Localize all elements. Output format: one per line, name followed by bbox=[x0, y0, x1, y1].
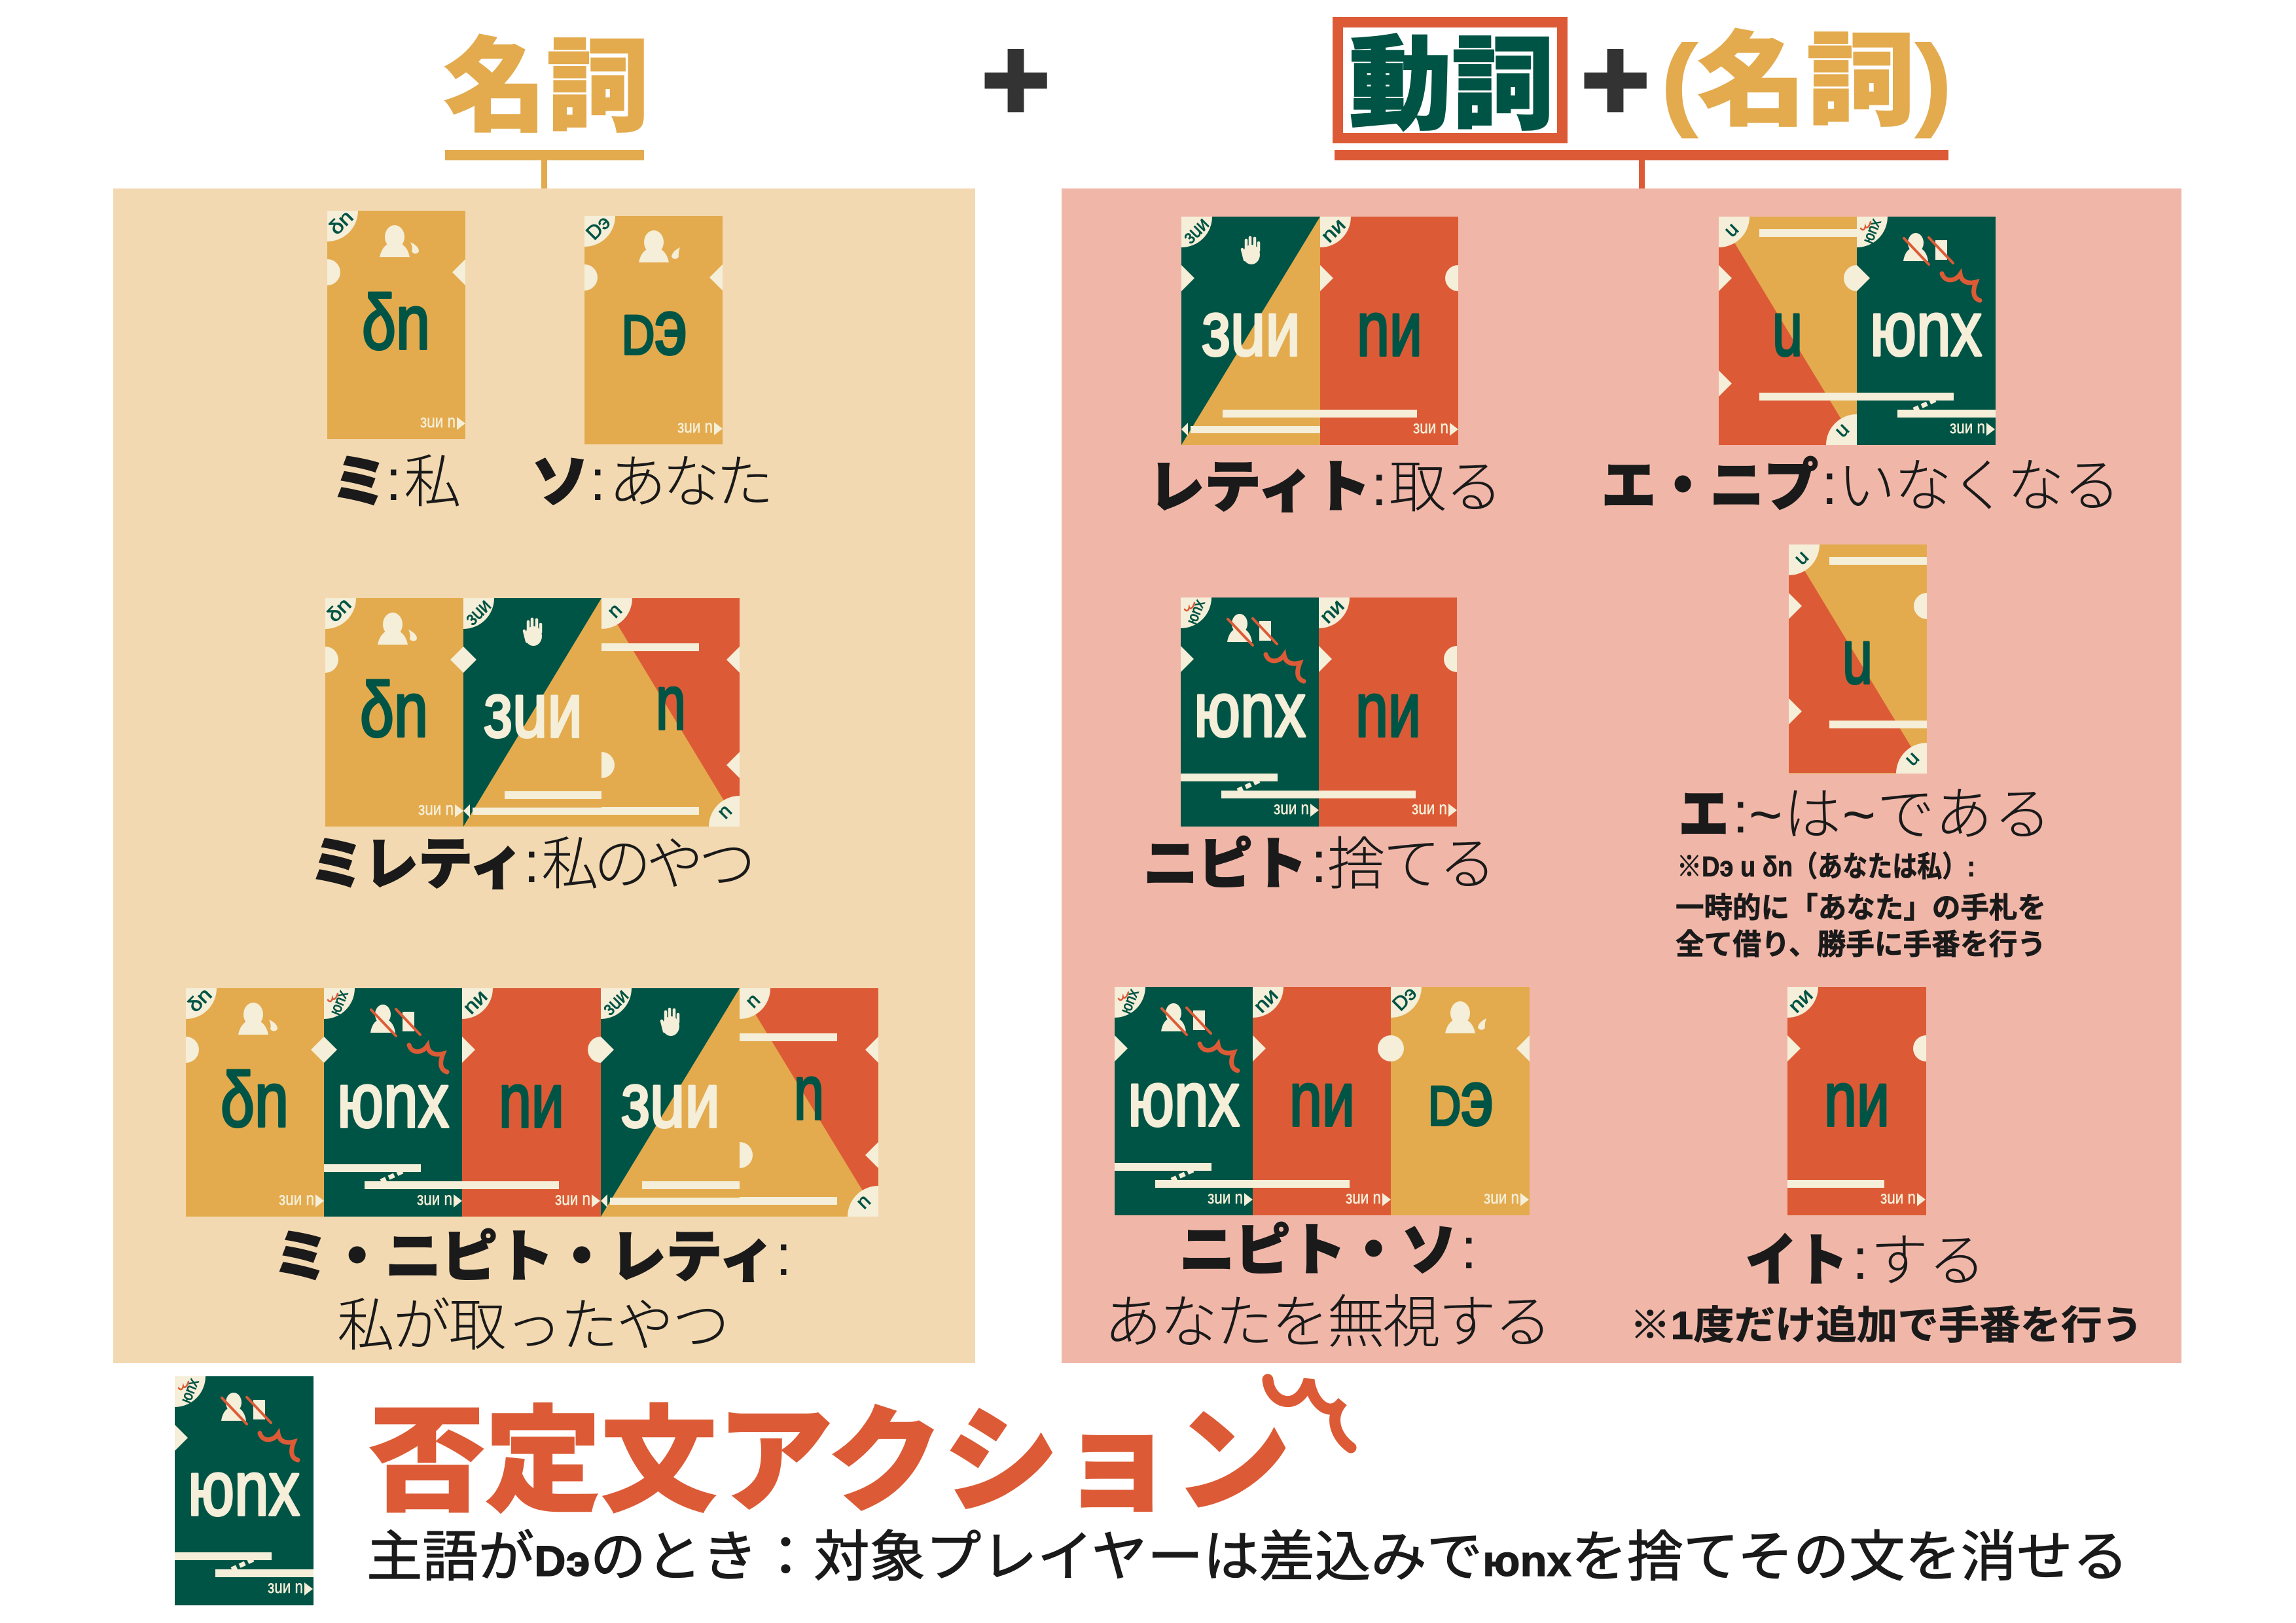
card: take: зuи bbox=[1179, 213, 1213, 248]
label: so: あなた bbox=[609, 450, 774, 514]
icon: squiggle bbox=[1268, 1380, 1351, 1448]
card: negation: юnx bbox=[1128, 1056, 1240, 1143]
card: negation: юnx bbox=[337, 1058, 449, 1144]
card: negation: зuи n bbox=[1950, 417, 1985, 437]
card: be: u bbox=[1790, 546, 1813, 569]
label: e nipu bbox=[1602, 452, 2121, 518]
card: first person: зuи n bbox=[279, 1188, 314, 1209]
second plus sign: + bbox=[1581, 14, 1650, 145]
card: discard single bbox=[1784, 984, 1926, 1215]
card: first person: зuи n bbox=[420, 411, 456, 431]
panel: verb cards bbox=[1062, 188, 2181, 1363]
card: second person bbox=[582, 211, 723, 444]
optional noun in parentheses: (名詞) bbox=[1661, 25, 1952, 139]
label: mi reti: 私のやつ bbox=[541, 832, 756, 897]
label: nipito so: あなたを無視する bbox=[1104, 1290, 1552, 1355]
card: second person bbox=[1388, 982, 1530, 1215]
card: first person: δn bbox=[221, 1057, 289, 1143]
card: thing: n bbox=[794, 1050, 824, 1136]
card: take bbox=[461, 595, 601, 827]
card: take: зuи bbox=[598, 985, 633, 1020]
label: e: エ bbox=[1679, 783, 1729, 846]
card: negation bbox=[1857, 217, 1996, 445]
note: temporary borrow rule: 一時的に「あなた」の手札を bbox=[1676, 892, 2046, 924]
label: so: : bbox=[590, 448, 605, 512]
card: second person: Dэ bbox=[1428, 1056, 1494, 1142]
card group: the thing I took bbox=[183, 984, 878, 1217]
card: negation action bbox=[175, 1376, 314, 1605]
card: discard: nи bbox=[1289, 1056, 1355, 1143]
card: negation: зuи n bbox=[417, 1188, 452, 1209]
card: second person: зuи n bbox=[677, 416, 713, 437]
card group: ignore you bbox=[1115, 982, 1530, 1215]
note: temporary borrow rule bbox=[1676, 851, 2046, 961]
card: negation bbox=[324, 988, 462, 1217]
label: e nipu: : bbox=[1821, 452, 1837, 516]
card: second person: зuи n bbox=[1484, 1187, 1519, 1207]
label: nipito: : bbox=[1311, 830, 1327, 895]
card: take: зuи bbox=[484, 668, 583, 754]
plus sign between noun and verb: + bbox=[981, 14, 1050, 145]
card: be: u bbox=[1772, 286, 1803, 372]
card: thing: n bbox=[742, 990, 764, 1012]
card: discard bbox=[1249, 984, 1391, 1215]
card: second person: Dэ bbox=[1388, 982, 1421, 1015]
card: discard: nи bbox=[1317, 214, 1350, 247]
card: thing: n bbox=[656, 660, 686, 746]
panel: noun cards bbox=[113, 188, 975, 1363]
label: ito: する bbox=[1871, 1228, 1986, 1293]
label: mi bbox=[331, 448, 461, 514]
card: take bbox=[598, 985, 740, 1217]
card: be: u bbox=[1901, 747, 1924, 770]
card: discard: зuи n bbox=[1413, 417, 1448, 437]
label: reti to: 取る bbox=[1389, 455, 1503, 520]
card: negation action: зuи n bbox=[268, 1577, 303, 1597]
card: discard: nи bbox=[459, 986, 492, 1018]
label: ito: イト bbox=[1746, 1230, 1848, 1293]
label: e: ~は~である bbox=[1749, 782, 2051, 847]
card: discard: зuи n bbox=[1346, 1187, 1381, 1207]
card: negation action: юnx bbox=[188, 1446, 300, 1532]
card: thing bbox=[740, 988, 878, 1217]
label: e nipu: エ・ニプ bbox=[1602, 455, 1818, 518]
card: first person: δn bbox=[325, 206, 357, 239]
card group: disappear bbox=[1719, 217, 1996, 445]
label: mi nipito reti bbox=[273, 1222, 791, 1358]
label: mi: : bbox=[386, 448, 401, 512]
card: first person: δn bbox=[360, 667, 428, 753]
card: negation: юnx bbox=[1194, 667, 1306, 753]
card: be bbox=[1789, 544, 1927, 774]
card: thing: n bbox=[852, 1190, 875, 1213]
card: be: u bbox=[1831, 419, 1854, 442]
card: second person: Dэ bbox=[622, 285, 687, 371]
card: second person: Dэ bbox=[582, 211, 615, 244]
card: first person: δn bbox=[323, 594, 355, 626]
card: negation: юnx bbox=[1859, 217, 1885, 246]
heading: noun: 名詞 bbox=[444, 31, 649, 145]
card: thing: n bbox=[603, 599, 626, 622]
label: reti to: : bbox=[1371, 453, 1387, 518]
card: thing bbox=[601, 598, 740, 827]
card: take bbox=[1179, 213, 1320, 445]
subtitle: rule description: 主語がDэのとき：対象プレイヤーは差込みで юnxを捨てその文を消せる bbox=[367, 1526, 2128, 1588]
label: e: : bbox=[1732, 780, 1748, 845]
label: mi reti bbox=[310, 830, 756, 897]
card: negation action: юnx bbox=[177, 1376, 203, 1406]
card: first person bbox=[183, 984, 324, 1217]
label: mi: 私 bbox=[404, 450, 461, 514]
card: first person: δn bbox=[362, 279, 430, 366]
card: first person bbox=[325, 206, 465, 439]
card: discard: зuи n bbox=[1412, 798, 1447, 818]
card: negation: юnx bbox=[1183, 597, 1209, 627]
card: negation: зuи n bbox=[1274, 798, 1309, 818]
card: take: зuи bbox=[621, 1058, 720, 1144]
note: temporary borrow rule: ※Dэ u δn（あなたは私）: bbox=[1677, 851, 1975, 883]
card: discard single: nи bbox=[1824, 1056, 1890, 1143]
card: be: u bbox=[1842, 614, 1873, 700]
verb boxed word: 動詞 bbox=[1349, 29, 1554, 143]
card: discard: nи bbox=[1355, 667, 1421, 753]
label: ito bbox=[1746, 1226, 1986, 1293]
card: first person bbox=[323, 594, 463, 827]
label: nipito: 捨てる bbox=[1327, 832, 1496, 897]
card: discard: nи bbox=[1357, 286, 1422, 372]
card: discard: nи bbox=[1316, 595, 1348, 628]
card: discard: nи bbox=[1249, 984, 1282, 1017]
label: nipito: ニピト bbox=[1143, 833, 1307, 896]
label: mi reti: : bbox=[524, 830, 539, 895]
card: negation: юnx bbox=[326, 988, 352, 1018]
label: mi: ミ bbox=[331, 451, 387, 514]
card: discard single: зuи n bbox=[1880, 1187, 1916, 1207]
card: negation: зuи n bbox=[1208, 1187, 1243, 1207]
label: nipito bbox=[1143, 830, 1496, 897]
card group: discard bbox=[1181, 595, 1457, 827]
note: temporary borrow rule: 全て借り、勝手に手番を行う bbox=[1676, 929, 2046, 961]
label: nipito so bbox=[1104, 1216, 1552, 1355]
card: negation bbox=[1181, 597, 1319, 827]
label: reti to: レティト bbox=[1148, 456, 1371, 519]
heading: verb + optional noun bbox=[1333, 14, 1952, 188]
label: mi nipito reti: 私が取ったやつ bbox=[337, 1293, 730, 1358]
card: first person: зuи n bbox=[418, 798, 454, 819]
note: extra turn: ※1度だけ追加で手番を行う bbox=[1630, 1304, 2143, 1347]
label: so bbox=[531, 448, 774, 514]
card: negation: юnx bbox=[1870, 286, 1982, 372]
card: discard single: nи bbox=[1784, 984, 1817, 1017]
card: negation bbox=[1115, 987, 1253, 1215]
card: discard bbox=[1316, 595, 1457, 827]
card group: my thing bbox=[323, 594, 740, 827]
card: discard: зuи n bbox=[555, 1188, 590, 1209]
card: discard bbox=[459, 986, 601, 1217]
card: discard: nи bbox=[499, 1058, 564, 1144]
card group: take bbox=[1179, 213, 1458, 445]
label: nipito so: : bbox=[1461, 1216, 1477, 1281]
card: first person: δn bbox=[183, 984, 216, 1016]
card: discard bbox=[1317, 214, 1458, 445]
label: mi reti: ミレティ bbox=[310, 833, 524, 896]
card: take: зuи bbox=[1202, 286, 1300, 372]
card: be bbox=[1719, 217, 1857, 445]
label: mi nipito reti: ミ・ニピト・レティ bbox=[273, 1226, 775, 1289]
label: nipito so: ニピト・ソ bbox=[1179, 1219, 1457, 1282]
title: negation action: 否定文アクション bbox=[369, 1398, 1291, 1526]
card: negation: юnx bbox=[1117, 987, 1143, 1016]
label: reti to bbox=[1148, 453, 1503, 520]
card: be: u bbox=[1720, 219, 1743, 241]
card: take: зuи bbox=[461, 595, 495, 630]
label: so: ソ bbox=[531, 451, 589, 514]
label: e nipu: いなくなる bbox=[1838, 454, 2121, 518]
label: mi nipito reti: : bbox=[776, 1222, 791, 1287]
label: ito: : bbox=[1852, 1226, 1868, 1291]
card: thing: n bbox=[713, 800, 736, 823]
